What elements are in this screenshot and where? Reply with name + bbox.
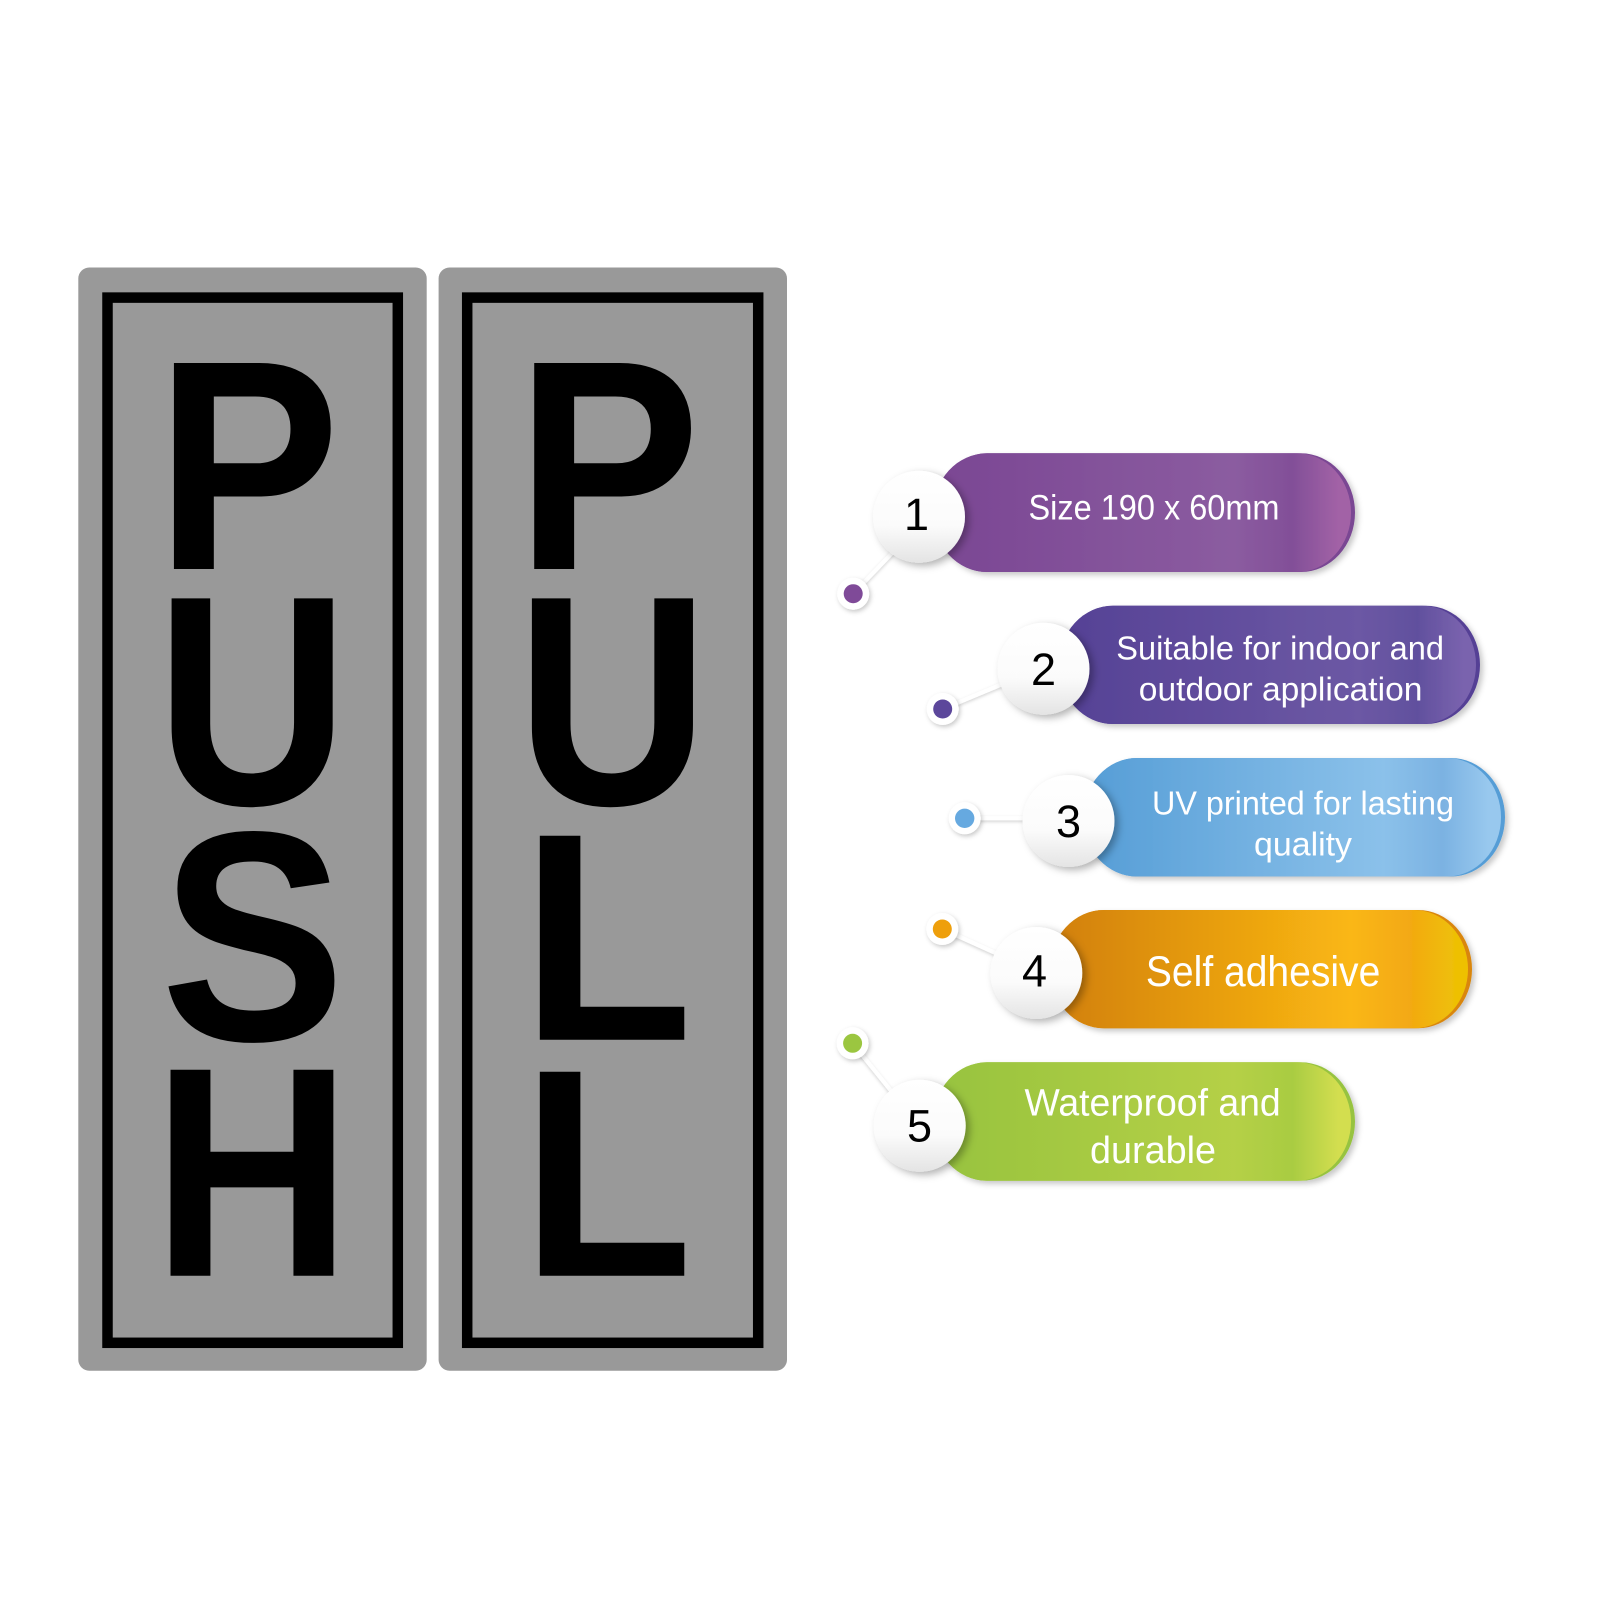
number badge 4: 4 [1022,946,1047,997]
text 5: durable [1090,1130,1216,1172]
PULL lettering: U [516,535,709,869]
number badge 2 [998,623,1090,715]
number badge 1 [873,471,965,563]
connector and dot 4 [926,913,1000,955]
number badge 5 [874,1080,966,1172]
text 4: Self adhesive [1146,948,1380,996]
feature 3: UV printed [949,758,1505,876]
text 3: UV printed for lasting [1152,784,1454,822]
PULL lettering: L [521,772,693,1103]
PUSH lettering [152,299,352,1340]
PUSH lettering: H [152,1006,352,1340]
pill 4 [1050,910,1472,1028]
feature 5: waterproof [837,1027,1355,1181]
number badge 1: 1 [904,489,929,540]
connector and dot 5 [837,1027,892,1092]
pill 3 [1083,758,1505,876]
PUSH lettering: U [156,535,349,869]
PULL lettering [516,299,709,1339]
text 3: quality [1254,826,1353,862]
pill 1 [933,453,1355,572]
text 2 [1116,629,1444,708]
text 2: outdoor application [1139,670,1422,708]
number badge 4 [990,927,1082,1019]
text 5: Waterproof and [1024,1083,1281,1125]
panel: PUSH sign [78,268,427,1371]
pill 2 [1059,606,1480,724]
pill 5 [933,1062,1355,1181]
number badge 3 [1022,775,1114,867]
panel: PULL sign [439,268,787,1371]
text 5 [1024,1083,1281,1172]
PULL lettering: P [516,299,700,633]
number badge 2: 2 [1031,644,1056,695]
connector and dot 3 [949,802,1030,834]
connector and dot 1 [837,550,895,610]
feature 2: indoor and outdoor [927,606,1480,725]
text 1: Size 190 x 60mm [1028,488,1280,527]
number badge 5: 5 [907,1101,932,1152]
PULL lettering: L [521,1008,693,1339]
feature 4: self adhesive [926,910,1472,1028]
connector and dot 2 [927,683,1005,725]
feature 1: size [837,453,1355,610]
PUSH lettering: S [160,770,345,1104]
text 3 [1152,784,1454,862]
number badge 3: 3 [1056,796,1081,847]
text 2: Suitable for indoor and [1116,629,1444,666]
PUSH lettering: P [155,299,340,633]
